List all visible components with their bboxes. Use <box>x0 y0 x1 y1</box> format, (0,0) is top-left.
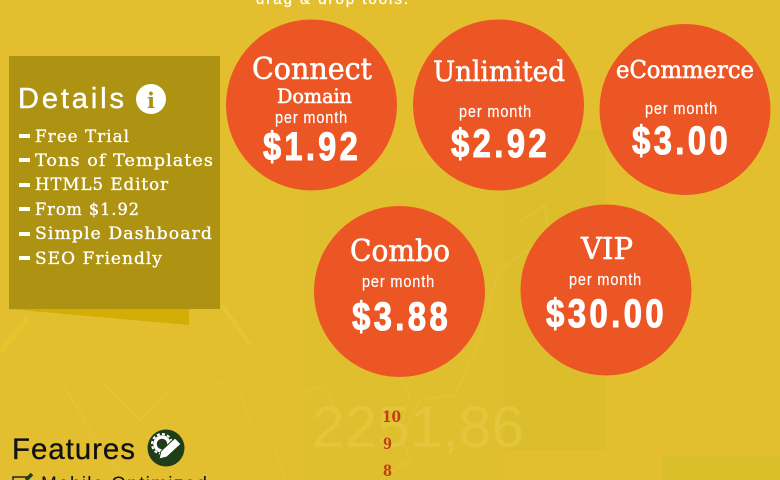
details list: Simple Dashboard <box>35 224 213 243</box>
details list: HTML5 Editor <box>35 175 169 194</box>
price circle: unlimited: Unlimited <box>433 55 565 88</box>
details list: Tons of Templates <box>35 151 214 170</box>
heading: details: Details <box>18 83 124 115</box>
icon: gear and pencil <box>148 430 184 466</box>
price circle: connect domain: Domain <box>277 84 352 108</box>
price circle: combo: per month <box>362 272 435 291</box>
price circle: ecommerce: $3.00 <box>632 119 731 163</box>
price circle: combo <box>314 206 485 377</box>
price circle: unlimited: $2.92 <box>451 122 550 166</box>
icon: info <box>136 84 166 114</box>
price circle: connect domain <box>226 20 397 190</box>
price circle: unlimited: per month <box>459 102 532 121</box>
price circle: combo: $3.88 <box>352 295 451 339</box>
details list <box>19 127 214 268</box>
icon: checkbox <box>13 474 32 480</box>
panel fold <box>9 309 189 325</box>
price circle: unlimited <box>413 20 584 190</box>
price circle: combo: Combo <box>350 234 450 269</box>
heading: features: Features <box>12 433 135 466</box>
price circle: ecommerce <box>600 24 770 195</box>
panel: details <box>9 56 220 325</box>
icon: info: i <box>147 88 155 113</box>
price circle: connect domain: per month <box>275 108 348 127</box>
details list: SEO Friendly <box>35 249 163 268</box>
chart axis numbers: 9 <box>383 434 392 453</box>
price circle: vip <box>520 204 692 376</box>
price circle: vip: per month <box>569 270 642 289</box>
chart axis numbers: 8 <box>383 461 392 480</box>
price circle: connect domain: Connect <box>252 52 372 87</box>
chart axis numbers: 10 <box>382 407 401 426</box>
price circle: connect domain: $1.92 <box>263 125 361 169</box>
price circle: vip: VIP <box>580 232 633 267</box>
price circle: ecommerce: eCommerce <box>616 56 754 84</box>
price circle: vip: $30.00 <box>546 292 667 336</box>
chart axis numbers <box>382 407 401 480</box>
details list: From $1.92 <box>35 200 140 219</box>
panel background <box>9 56 220 309</box>
background: 2251,86 <box>312 395 524 460</box>
price circle: ecommerce: per month <box>645 99 718 118</box>
details list: Free Trial <box>35 127 130 146</box>
